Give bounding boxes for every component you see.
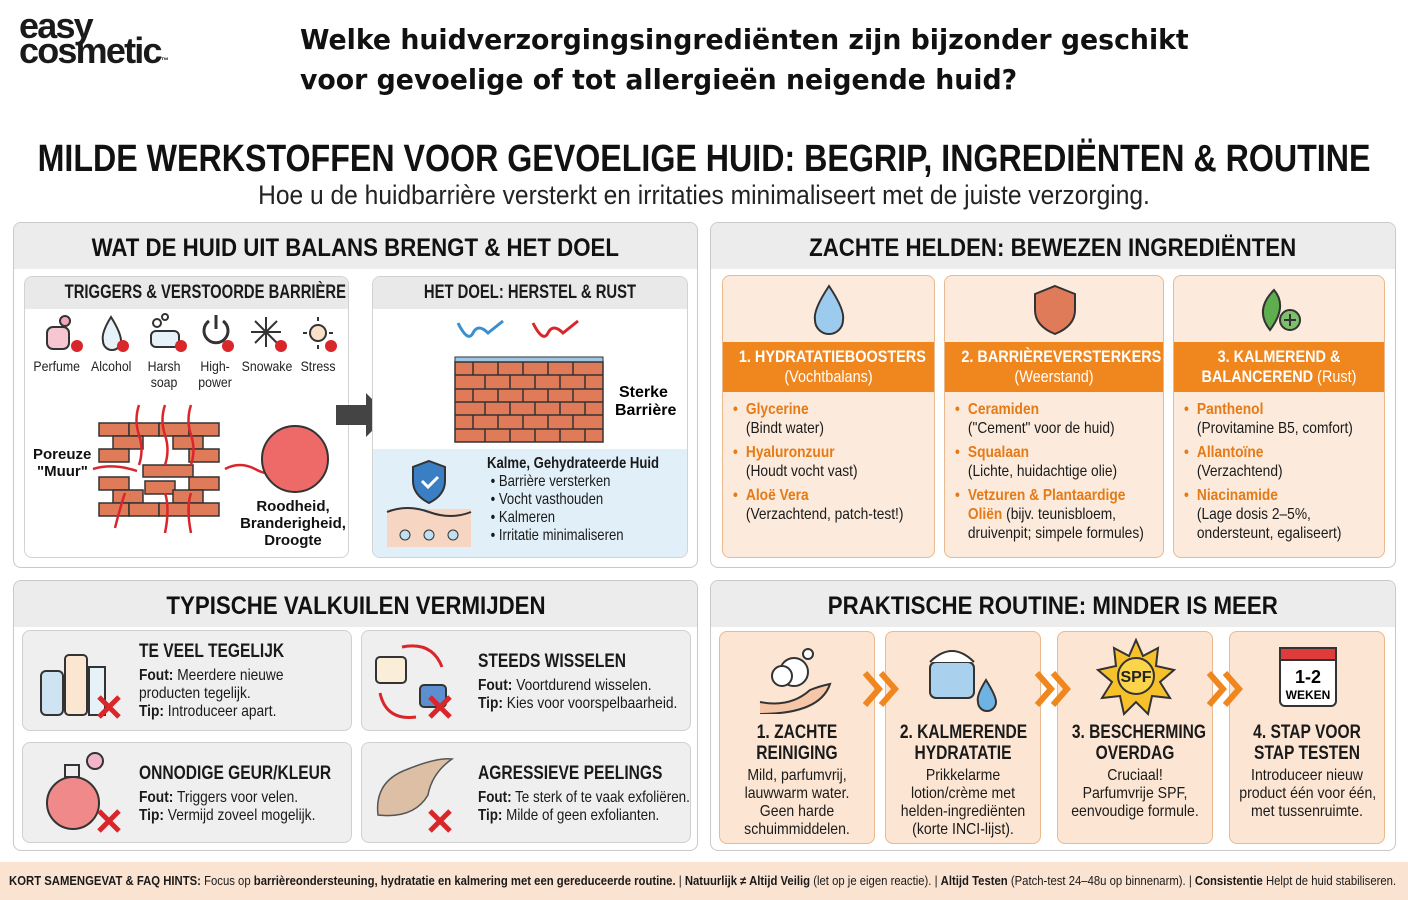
card: hydratatieboosters: (Vochtbalans) xyxy=(784,367,873,386)
card: onnodige geur: ONNODIGE GEUR/KLEUR xyxy=(139,763,331,784)
step 4: STAP TESTEN xyxy=(1254,743,1360,764)
card: barrièreversterkers: ("Cement" voor de huid) xyxy=(968,420,1115,437)
logo xyxy=(19,5,169,71)
trigger icons: "Muur" xyxy=(37,463,88,480)
trigger icons: Harsh xyxy=(148,358,180,374)
step 1: schuimmiddelen. xyxy=(744,821,850,838)
card: kalmerend: ondersteunt, egaliseert) xyxy=(1197,525,1341,542)
footer summary xyxy=(0,862,1408,900)
card: te veel tegelijk xyxy=(22,630,352,731)
step 1 xyxy=(719,631,875,844)
trigger icons: Stress xyxy=(301,358,336,374)
card: kalmerend: (Verzachtend) xyxy=(1197,463,1283,480)
card: barrièreversterkers: Oliën (bijv. teunisbloem, xyxy=(968,506,1116,523)
step 4: WEKEN xyxy=(1286,688,1330,702)
step 3 xyxy=(1057,631,1213,844)
step 3: OVERDAG xyxy=(1096,743,1174,764)
panel: valkuilen xyxy=(13,580,698,851)
card: barrièreversterkers: Ceramiden xyxy=(968,401,1039,418)
trigger icons: Poreuze xyxy=(33,446,91,463)
step 4: 1-2 xyxy=(1295,667,1321,687)
card: onnodige geur xyxy=(22,742,352,843)
trigger icons: Droogte xyxy=(264,532,322,549)
card: kalmerend: BALANCEREND (Rust) xyxy=(1202,367,1356,386)
step 4: Introduceer nieuw xyxy=(1251,767,1363,784)
card: onnodige geur: Fout: Triggers voor velen. xyxy=(139,789,298,806)
card: kalmerend: 3. KALMEREND & xyxy=(1218,347,1340,366)
card: steeds wisselen: Fout: Voortdurend wisselen. xyxy=(478,677,652,694)
trigger icons: Perfume xyxy=(33,358,80,374)
card: hydratatieboosters xyxy=(722,275,935,558)
card: barrièreversterkers: Squalaan xyxy=(968,444,1029,461)
subpanel: doel: • Barrière versterken xyxy=(491,473,610,490)
subpanel: doel: Barrière xyxy=(615,402,676,419)
subtitle: Hoe u de huidbarrière versterkt en irritaties minimaliseert met de juiste verzorging. xyxy=(258,180,1150,210)
arrow xyxy=(336,393,372,437)
question heading xyxy=(300,23,1189,96)
card: barrièreversterkers: (Weerstand) xyxy=(1014,367,1094,386)
step 4: product één voor één, xyxy=(1239,785,1376,802)
subpanel: doel: Sterke xyxy=(619,384,668,401)
step 4: met tussenruimte. xyxy=(1251,803,1363,820)
card: agressieve peelings xyxy=(361,742,691,843)
chevron 1 xyxy=(862,671,899,707)
card: barrièreversterkers: druivenpit; simpele formules) xyxy=(968,525,1144,542)
question heading: Welke huidverzorgingsingrediënten zijn bijzonder geschikt xyxy=(300,23,1189,56)
subpanel: triggers: TRIGGERS & VERSTOORDE BARRIÈRE xyxy=(65,282,346,303)
subpanel: doel: HET DOEL: HERSTEL & RUST xyxy=(424,282,636,303)
trigger icons: power xyxy=(198,374,232,390)
logo: easy xyxy=(19,5,92,46)
step 4: 4. STAP VOOR xyxy=(1253,722,1361,743)
subpanel: doel: • Kalmeren xyxy=(491,509,555,526)
subpanel: doel: Kalme, Gehydrateerde Huid xyxy=(487,455,659,472)
card: kalmerend: (Lage dosis 2–5%, xyxy=(1197,506,1311,523)
card: kalmerend: Niacinamide xyxy=(1197,487,1278,504)
step 1: REINIGING xyxy=(756,743,838,764)
step 4 xyxy=(1229,631,1385,844)
panel: zachte helden xyxy=(710,222,1396,568)
card: barrièreversterkers: 2. BARRIÈREVERSTERKERS xyxy=(961,347,1161,366)
logo: cosmetic™ xyxy=(19,30,169,71)
chevron 3 xyxy=(1206,671,1243,707)
broken wall xyxy=(99,423,219,516)
step 2: HYDRATATIE xyxy=(915,743,1011,764)
card: te veel tegelijk: TE VEEL TEGELIJK xyxy=(139,641,284,662)
card: hydratatieboosters: (Verzachtend, patch-test!) xyxy=(746,506,903,523)
card: kalmerend: Allantoïne xyxy=(1197,444,1263,461)
card: barrièreversterkers: (Lichte, huidachtige olie) xyxy=(968,463,1117,480)
card: hydratatieboosters: Glycerine xyxy=(746,401,809,418)
step 3: eenvoudige formule. xyxy=(1071,803,1199,820)
card: steeds wisselen xyxy=(361,630,691,731)
card: hydratatieboosters: Aloë Vera xyxy=(746,487,809,504)
card: steeds wisselen: Tip: Kies voor voorspelbaarheid. xyxy=(478,695,677,712)
subpanel: doel: • Vocht vasthouden xyxy=(491,491,603,508)
trigger icons xyxy=(33,313,346,549)
step 2: 2. KALMERENDE xyxy=(900,722,1027,743)
trigger icons: Alcohol xyxy=(91,358,131,374)
step 3: SPF xyxy=(1120,669,1152,686)
footer summary: KORT SAMENGEVAT & FAQ HINTS: Focus op barrièreondersteuning, hydratatie en kalmering met een gereduceerde routine. | Natuurlijk ≠ Altijd Veilig (let op je eigen reactie). | Altijd Testen (Patch-test 24–48u op binnenarm). | Consistentie Helpt de huid stabiliseren. xyxy=(9,874,1396,888)
panel: balans & doel xyxy=(13,222,698,568)
panel: valkuilen: TYPISCHE VALKUILEN VERMIJDEN xyxy=(166,592,545,620)
trigger icons: Branderigheid, xyxy=(240,515,346,532)
step 1: 1. ZACHTE xyxy=(757,722,837,743)
card: agressieve peelings: Tip: Milde of geen exfolianten. xyxy=(478,807,659,824)
card: onnodige geur: Tip: Vermijd zoveel mogelijk. xyxy=(139,807,315,824)
step 3: 3. BESCHERMING xyxy=(1072,722,1206,743)
main title: MILDE WERKSTOFFEN VOOR GEVOELIGE HUID: BEGRIP, INGREDIËNTEN & ROUTINE xyxy=(38,138,1370,180)
panel: balans & doel: WAT DE HUID UIT BALANS BRENGT & HET DOEL xyxy=(92,234,619,262)
subpanel: doel: • Irritatie minimaliseren xyxy=(491,527,624,544)
card: hydratatieboosters: (Bindt water) xyxy=(746,420,824,437)
trigger icons: Snowake xyxy=(242,358,292,374)
step 3: Parfumvrije SPF, xyxy=(1083,785,1187,802)
card: hydratatieboosters: 1. HYDRATATIEBOOSTERS xyxy=(739,347,926,366)
trigger icons: High- xyxy=(200,358,230,374)
subpanel: doel xyxy=(372,276,688,558)
step 3: Cruciaal! xyxy=(1107,767,1163,784)
card: barrièreversterkers: Vetzuren & Plantaardige xyxy=(968,487,1125,504)
chevron 2 xyxy=(1034,671,1071,707)
step 2: Prikkelarme xyxy=(926,767,1000,784)
card: hydratatieboosters: Hyaluronzuur xyxy=(746,444,835,461)
card: te veel tegelijk: producten tegelijk. xyxy=(139,685,251,702)
card: kalmerend: (Provitamine B5, comfort) xyxy=(1197,420,1353,437)
panel: routine: PRAKTISCHE ROUTINE: MINDER IS MEER xyxy=(828,592,1278,620)
card: te veel tegelijk: Tip: Introduceer apart. xyxy=(139,703,276,720)
step 2: lotion/crème met xyxy=(911,785,1015,802)
card: hydratatieboosters: (Houdt vocht vast) xyxy=(746,463,858,480)
panel: zachte helden: ZACHTE HELDEN: BEWEZEN INGREDIËNTEN xyxy=(809,234,1297,262)
step 2: helden-ingrediënten xyxy=(901,803,1025,820)
card: agressieve peelings: AGRESSIEVE PEELINGS xyxy=(478,763,662,784)
question heading: voor gevoelige of tot allergieën neigende huid? xyxy=(300,63,1017,96)
subpanel: triggers xyxy=(24,276,349,558)
card: kalmerend: Panthenol xyxy=(1197,401,1263,418)
card: kalmerend xyxy=(1173,275,1385,558)
card: steeds wisselen: STEEDS WISSELEN xyxy=(478,651,626,672)
card: barrièreversterkers xyxy=(944,275,1164,558)
card: te veel tegelijk: Fout: Meerdere nieuwe xyxy=(139,667,284,684)
step 1: Geen harde xyxy=(760,803,834,820)
card: agressieve peelings: Fout: Te sterk of te vaak exfoliëren. xyxy=(478,789,690,806)
step 1: Mild, parfumvrij, xyxy=(747,767,847,784)
step 2 xyxy=(885,631,1041,844)
trigger icons: soap xyxy=(151,374,177,390)
step 2: (korte INCI-lijst). xyxy=(912,821,1014,838)
trigger icons: Roodheid, xyxy=(256,498,330,515)
step 1: lauwwarm water. xyxy=(745,785,849,802)
panel: routine xyxy=(710,580,1396,851)
